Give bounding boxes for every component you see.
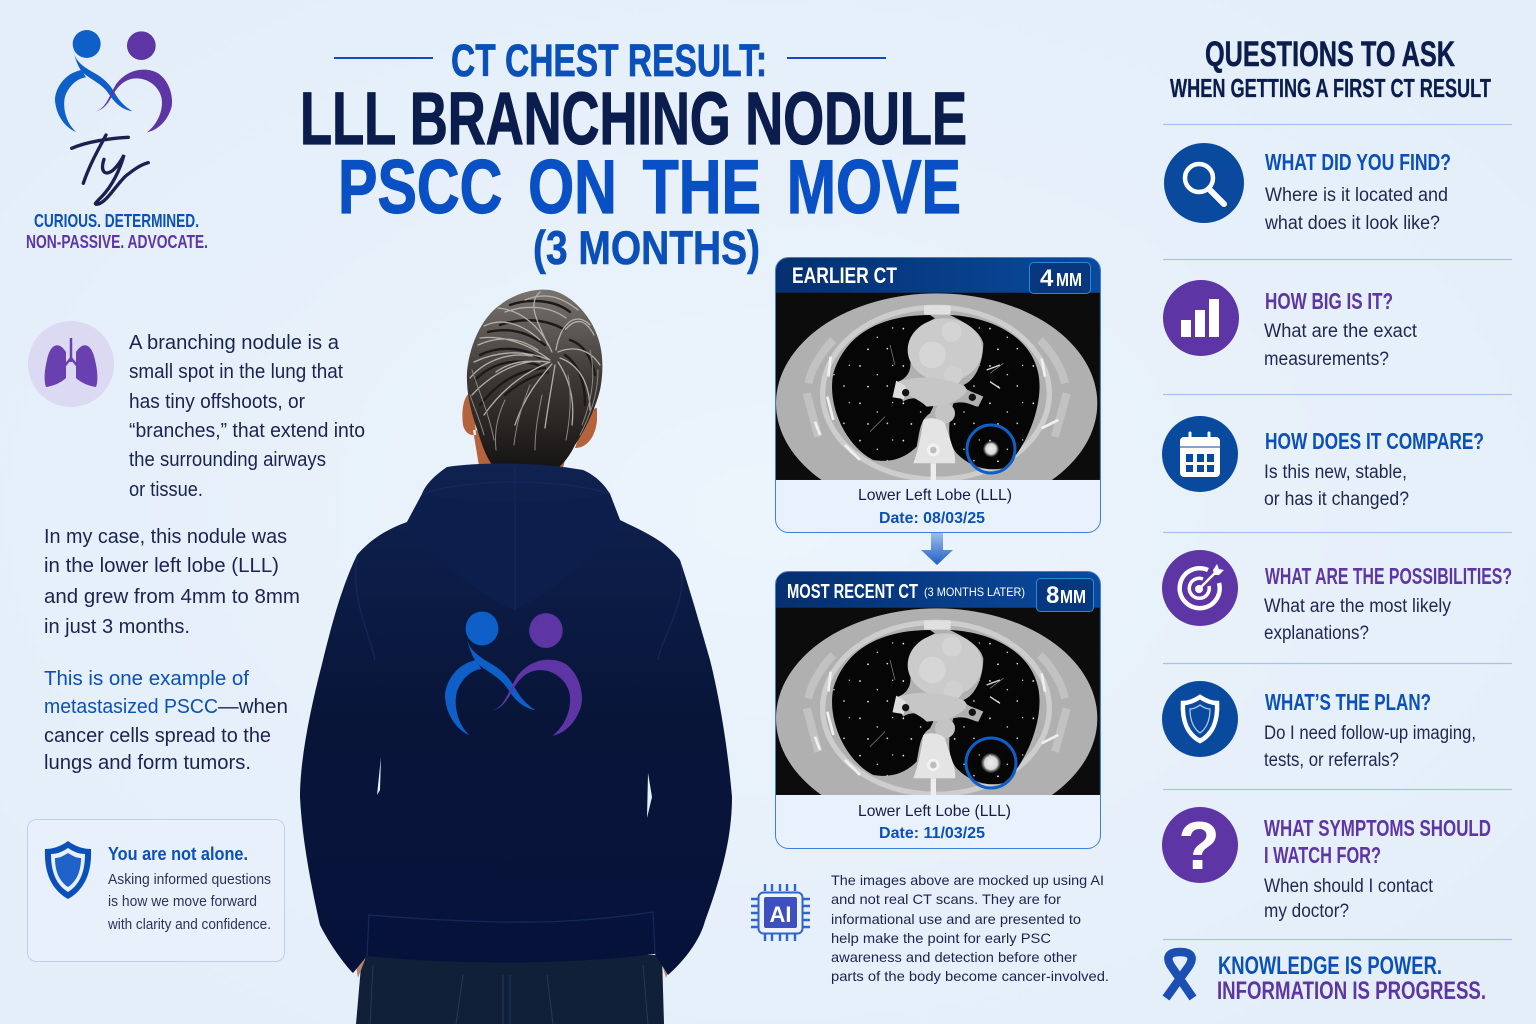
icon: question mark: ? [1178,808,1220,884]
text: AI disclaimer: parts of the body become cancer-involved. [831,968,1109,984]
hoodie logo [445,611,582,736]
text: AI disclaimer: and not real CT scans. They are for [831,891,1061,907]
question: how does it compare: Is this new, stable, [1264,462,1407,483]
CT scan image [776,293,1100,513]
text: AI disclaimer [831,872,1109,984]
text: what is a branching nodule: or tissue. [129,479,203,501]
panel: most recent CT: MOST RECENT CT [787,581,918,603]
icon: ribbon [1166,952,1193,998]
question: what did you find [1164,143,1451,234]
question: what symptoms [1162,807,1491,922]
text: what is a branching nodule: “branches,” that extend into [129,420,365,442]
hair [467,290,602,468]
title: PSCC ON THE MOVE [338,145,961,230]
panel: most recent CT [776,572,1100,848]
signature: Ty [72,135,148,204]
text: my case: in just 3 months. [44,616,190,638]
text: my case [44,526,300,638]
question: what's the plan: tests, or referrals? [1264,750,1399,771]
panel: most recent CT: Lower Left Lobe (LLL) [858,803,1011,820]
title: LLL BRANCHING NODULE [300,77,967,160]
panel: earlier CT: EARLIER CT [792,263,897,288]
question: how big is it: HOW BIG IS IT? [1265,288,1393,314]
question: how does it compare: or has it changed? [1264,489,1409,510]
arrow [921,533,953,565]
icon: magnifier [1164,143,1244,223]
closing statement: KNOWLEDGE IS POWER. [1218,952,1442,980]
text: AI disclaimer: help make the point for early PSC [831,930,1051,946]
question: what's the plan: WHAT’S THE PLAN? [1265,689,1431,715]
question: what are the possibilities [1162,550,1512,644]
callout: you are not alone: is how we move forward [108,893,257,910]
logo: Ty [26,30,208,252]
callout: you are not alone: You are not alone. [108,844,248,864]
text: my case: in the lower left lobe (LLL) [44,555,279,577]
icon: lungs [28,321,114,407]
question: how does it compare [1162,416,1484,510]
question: what did you find: WHAT DID YOU FIND? [1265,149,1451,175]
text: metastasized PSCC: —when [218,696,288,718]
question: what symptoms: When should I contact [1264,876,1434,897]
size badge [1030,262,1090,294]
tagline [26,211,208,252]
question: how big is it [1163,280,1418,370]
question: what did you find: Where is it located and [1265,185,1448,206]
size badge: 4 [1040,265,1054,292]
title: (3 MONTHS) [533,221,760,274]
text: my case: and grew from 4mm to 8mm [44,586,300,608]
icon: target [1162,550,1238,626]
text: my case: In my case, this nodule was [44,526,287,548]
question: how big is it: measurements? [1264,349,1389,370]
panel: most recent CT: Date: 11/03/25 [879,825,985,842]
text: what is a branching nodule: has tiny offshoots, or [129,391,305,413]
icon: AI chip [751,884,810,941]
tagline: CURIOUS. DETERMINED. [34,211,199,231]
text: metastasized PSCC: lungs and form tumors. [44,752,251,774]
panel: earlier CT: Lower Left Lobe (LLL) [858,487,1012,504]
icon: question mark [1162,807,1238,884]
question: what are the possibilities: explanations? [1264,623,1369,644]
closing statement [1217,952,1486,1005]
callout: you are not alone: Asking informed questions [108,871,271,888]
panel: earlier CT: Date: 08/03/25 [879,510,985,527]
size badge [1036,578,1094,612]
text: metastasized PSCC: This is one example of [44,668,249,690]
question: what's the plan [1162,681,1476,771]
panel: most recent CT: (3 MONTHS LATER) [924,585,1025,599]
text: what is a branching nodule [28,321,365,501]
size badge: MM [1056,270,1082,290]
icon: shield [1162,681,1238,757]
question: what symptoms: I WATCH FOR? [1264,842,1381,868]
question: how big is it: What are the exact [1264,321,1418,342]
text: what is a branching nodule: small spot in the lung that [129,361,343,383]
callout: you are not alone [28,820,284,962]
jeans [356,955,664,1024]
text: metastasized PSCC: metastasized PSCC [44,696,218,718]
question: what did you find: what does it look like? [1264,213,1440,234]
icon: shield [45,841,91,899]
question: what are the possibilities: What are the most likely [1264,596,1451,617]
icon: bar chart [1163,280,1239,356]
size badge: MM [1060,587,1086,607]
text: what is a branching nodule: A branching nodule is a [129,332,340,354]
person from behind wearing hoodie [300,290,732,1024]
hood and seams [407,494,620,610]
arm and body gaps [377,757,652,818]
text: what is a branching nodule: the surrounding airways [129,449,326,471]
text: AI disclaimer: informational use and are presented to [831,911,1081,927]
text: metastasized PSCC: cancer cells spread to the [44,725,271,747]
hoodie [300,464,732,975]
icon: AI chip: AI [770,902,792,927]
question: what symptoms: my doctor? [1264,901,1349,922]
size badge: 8 [1046,582,1059,609]
text: metastasized PSCC [44,668,288,774]
icon: calendar [1162,416,1238,492]
title [300,35,967,274]
panel: earlier CT [776,258,1100,532]
text: AI disclaimer: The images above are mocked up using AI [831,872,1104,888]
callout: you are not alone: with clarity and confidence. [107,916,271,933]
title: CT CHEST RESULT: [451,35,767,86]
ears and neck [462,392,597,472]
tagline: NON-PASSIVE. ADVOCATE. [26,232,208,252]
heading: questions to ask [1170,35,1491,103]
CT scan image [776,608,1100,828]
logo mark [55,30,172,132]
text: AI disclaimer: awareness and detection before other [831,949,1077,965]
question: what's the plan: Do I need follow-up imaging, [1264,723,1476,744]
